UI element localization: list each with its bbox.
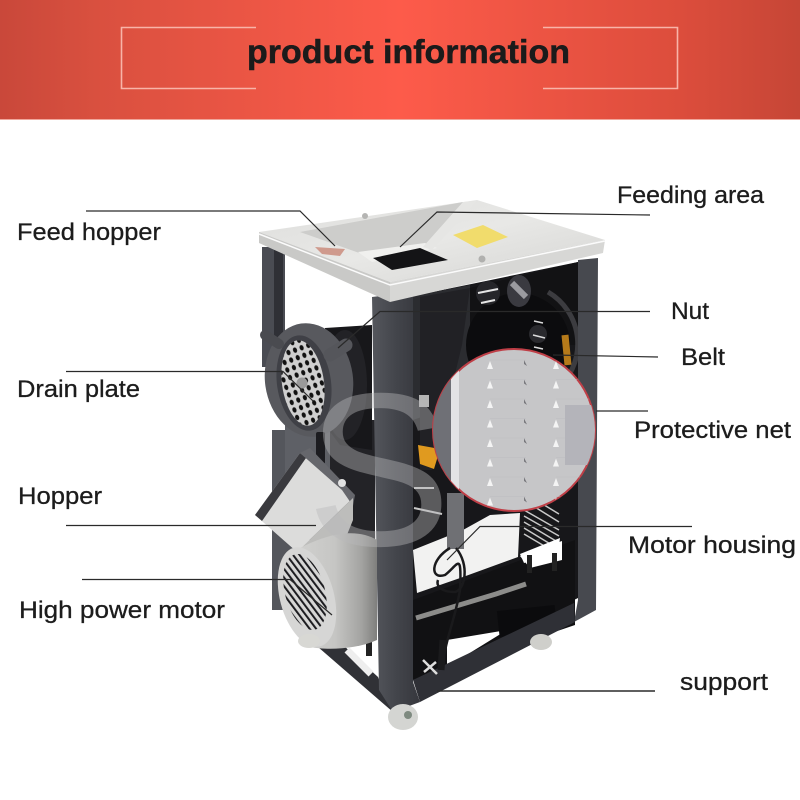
warning sticker [453, 225, 508, 248]
radiator fins [524, 500, 559, 547]
lower base and openings [413, 538, 575, 680]
label: Hopper: Hopper [18, 483, 102, 510]
label: Motor housing: Motor housing [628, 532, 796, 559]
discharge hopper [255, 448, 355, 565]
label: Protective net: Protective net [634, 417, 791, 444]
grinder body [323, 325, 372, 450]
label: Nut: Nut [671, 298, 709, 325]
top plate [259, 200, 605, 302]
watermark: S [306, 349, 451, 592]
rear frame legs [262, 247, 375, 610]
motor fan cover [268, 541, 346, 653]
power cable [423, 493, 465, 674]
leader lines [66, 211, 692, 691]
label: High power motor: High power motor [19, 597, 225, 624]
magnified protective net [432, 348, 596, 512]
label: Belt: Belt [681, 344, 725, 371]
label: support: support [680, 669, 768, 696]
drain plate [276, 337, 330, 429]
rear right frame leg [574, 258, 598, 622]
title: product information [247, 33, 570, 70]
label: Drain plate: Drain plate [17, 376, 140, 403]
label: Feed hopper: Feed hopper [17, 219, 161, 246]
base frame left bar [318, 640, 393, 712]
base frame right bar [413, 603, 575, 702]
motor housing cover [413, 513, 520, 593]
dark machine interior [413, 262, 578, 680]
front frame leg [372, 292, 420, 712]
cable gland holes [476, 275, 547, 349]
grinder head with drain plate [257, 317, 361, 464]
title frame [122, 28, 678, 88]
feeding funnel [300, 202, 463, 255]
machine illustration [255, 200, 614, 730]
header banner [0, 0, 800, 120]
label: Feeding area: Feeding area [617, 182, 765, 209]
nut knob [330, 345, 346, 355]
high power motor [268, 533, 377, 653]
casters [298, 634, 552, 730]
